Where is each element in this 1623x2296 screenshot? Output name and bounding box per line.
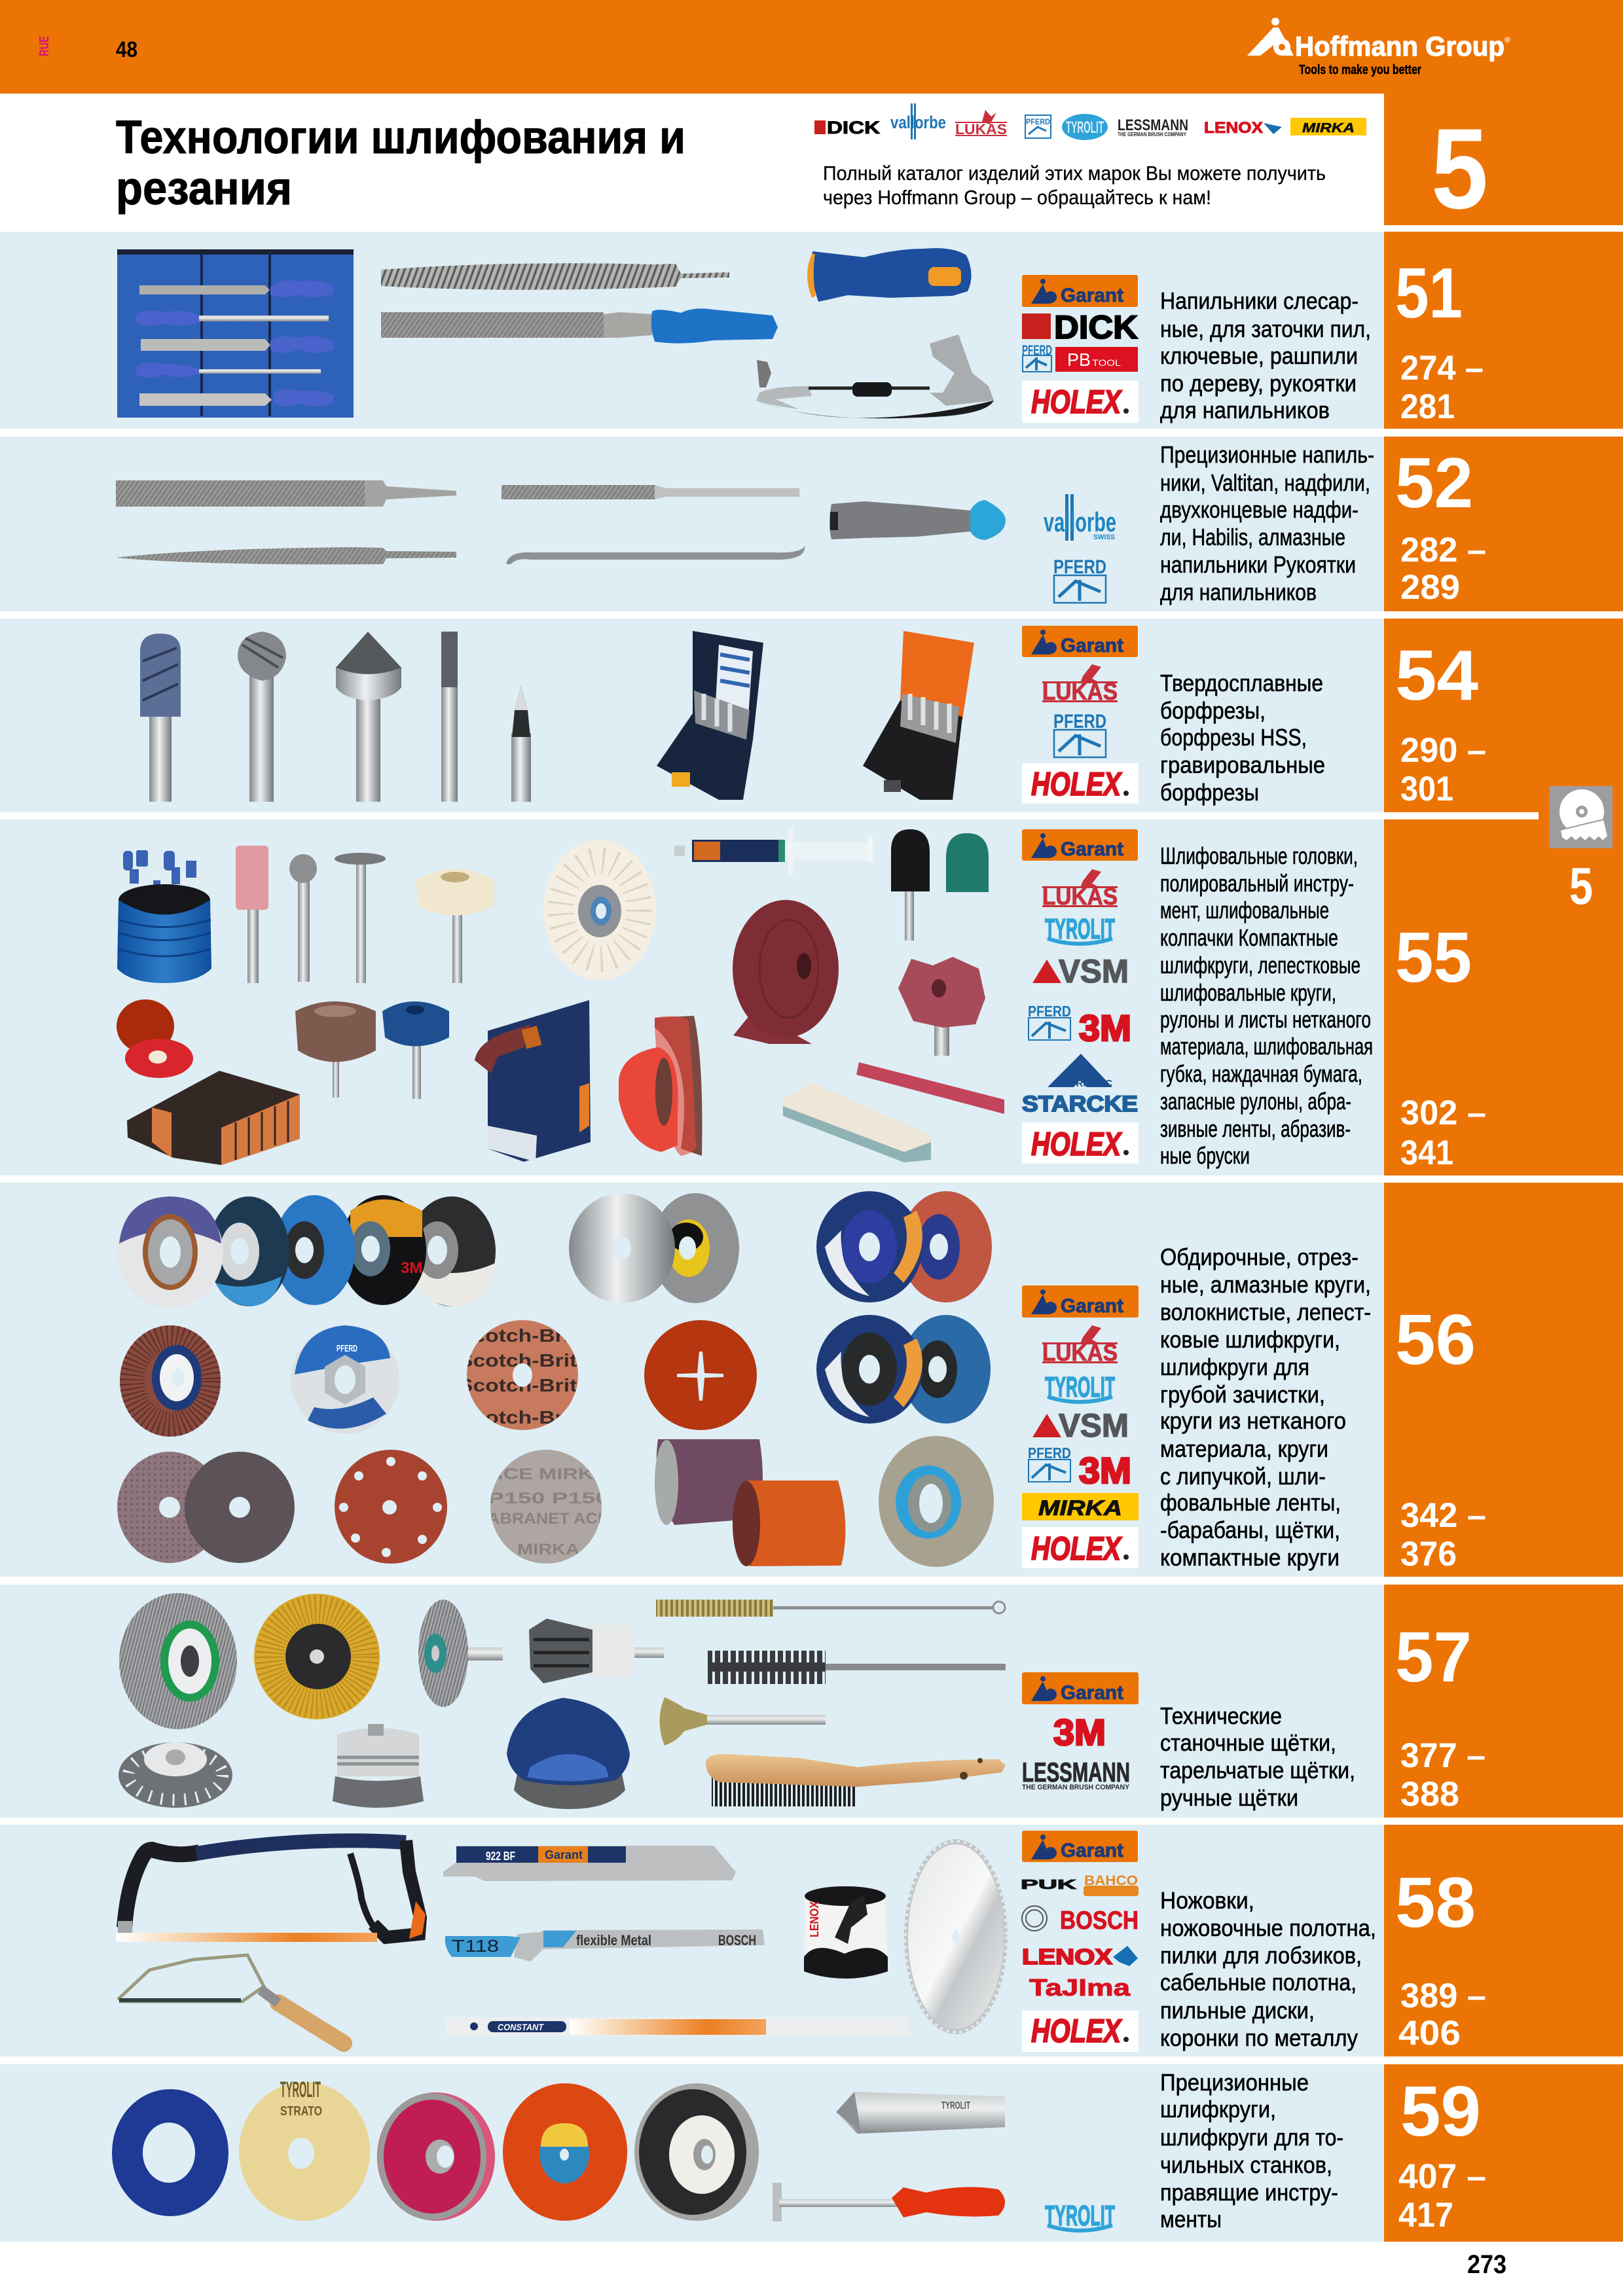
logo: Bosch: BOSCH: [1060, 1907, 1139, 1935]
group number 51: 51: [1395, 253, 1463, 333]
description 55: мент, шлифовальные: [1160, 897, 1329, 924]
description 56: фовальные ленты,: [1160, 1489, 1341, 1516]
description 54: борфрезы,: [1160, 697, 1266, 724]
product: Scotch-Brite disc: Scotch-Brite: [458, 1350, 589, 1371]
product: hacksaw: [116, 1840, 426, 1942]
chapter number block: [1384, 94, 1623, 233]
brand logo row: LENOX: [1204, 119, 1263, 137]
brand logos band 54: [1022, 626, 1139, 804]
product: pink mounted stone: [236, 846, 268, 983]
brand logo row: LESSMANN: [1118, 117, 1188, 134]
description 59: шлифкруги для то-: [1160, 2124, 1343, 2151]
pages 342-376: 342 –: [1400, 1496, 1486, 1535]
description 52: двухконцевые надфи-: [1160, 496, 1359, 523]
description 58: сабельные полотна,: [1160, 1969, 1357, 1996]
product: burr set in navy case: [657, 631, 763, 800]
product: half round rasp: [381, 263, 729, 290]
logo: PFERD: PFERD: [1053, 711, 1106, 732]
product: diamond dresser: [836, 2092, 1005, 2134]
brand logos band 59: [1045, 2200, 1115, 2232]
product: adjustable file holder: [756, 334, 994, 418]
description 58: Ножовки,: [1160, 1887, 1254, 1914]
product: Mirka net disc: MIRKA: [517, 1541, 579, 1558]
product: black tube brush: [708, 1651, 1006, 1684]
catalog note: Полный каталог изделий этих марок Вы можете получить: [823, 162, 1326, 185]
logo: Bahco: [1084, 1873, 1139, 1896]
product: green sanding cap: [946, 833, 989, 892]
description 59: шлифкруги,: [1160, 2096, 1276, 2123]
product: reciprocating blade: Garant: [545, 1848, 583, 1861]
product: flap disc and blue cleaning disc: [816, 1315, 991, 1424]
description 51: ключевые, рашпили: [1160, 342, 1358, 369]
description 52: ли, Habilis, алмазные: [1160, 524, 1345, 550]
pages 377-388: 388: [1400, 1775, 1459, 1814]
small vertical code RUE: RUE: [37, 36, 52, 56]
brand logo row: PFERD: [1026, 117, 1050, 126]
product: blue canister with mounted points: [117, 850, 211, 983]
product: knotted end brush: [529, 1619, 664, 1683]
group number 58: 58: [1395, 1863, 1476, 1943]
logo: Vallorbe: SWISS: [1093, 533, 1115, 541]
logo: VSM: VSM: [1059, 1407, 1129, 1444]
product: cream flap wheel: [416, 869, 494, 983]
description 56: грубой зачистки,: [1160, 1381, 1325, 1408]
pages 282-289: 282 –: [1400, 531, 1486, 569]
product: Scotch-Brite disc: Scotch-Brite: [458, 1375, 589, 1395]
pages 282-289: 289: [1400, 568, 1460, 607]
product: flap discs navy and red: [816, 1191, 992, 1302]
brand logo row: TYROLIT: [1066, 118, 1104, 137]
product: hacksaw blade long: CONSTANT: [498, 2022, 544, 2032]
logo: Vallorbe: [1044, 494, 1116, 541]
product: yellow bristle disc: [254, 1594, 380, 1719]
pages 274-281: 281: [1400, 387, 1455, 426]
logo: Tyrolit: TYROLIT: [1045, 1371, 1115, 1403]
logo: Garant: Garant: [1061, 635, 1123, 656]
product: oval burr: [238, 632, 286, 802]
product: blue grinding wheel: [112, 2089, 228, 2216]
logo: PB Swiss Tools: TOOL: [1092, 357, 1121, 368]
product: sanding sponge blocks: [127, 1071, 300, 1165]
product: reciprocating blade: 922 BF: [486, 1850, 515, 1863]
description 55: шлифкруги, лепестковые: [1160, 952, 1360, 978]
product: white polishing buff: [543, 840, 656, 980]
group number 57: 57: [1395, 1617, 1472, 1697]
group number 52: 52: [1395, 443, 1473, 523]
product: slender burr: [441, 632, 458, 802]
product: Mirka net disc: [488, 1450, 609, 1564]
panel: band 55 grinding heads: [0, 819, 1623, 1175]
brand logo row: DICK: [827, 118, 881, 137]
description 56: Обдирочные, отрез-: [1160, 1244, 1359, 1270]
logo: Tyrolit: [1045, 1371, 1115, 1403]
logo: Hoffmann Group: [1247, 18, 1510, 77]
description 56: шлифкруги для: [1160, 1354, 1309, 1380]
description 54: борфрезы: [1160, 779, 1259, 806]
panel: band 52 precision files: [0, 437, 1623, 611]
logo: Garant: Garant: [1061, 1682, 1123, 1704]
description 56: с липучкой, шли-: [1160, 1463, 1326, 1490]
description 56: материала, круги: [1160, 1435, 1328, 1462]
logo: Hoffmann Group: ®: [1504, 35, 1510, 45]
product: abrasive drum: [655, 1439, 763, 1525]
pages 290-301: 290 –: [1400, 731, 1486, 770]
logo: Lukas: LUKAS: [1042, 678, 1118, 705]
description 51: ные, для заточки пил,: [1160, 315, 1371, 342]
panel: page title area: [0, 94, 1623, 233]
logo: PFERD: [1028, 1003, 1071, 1040]
product: thin disc point: [335, 853, 386, 983]
description 54: Твердосплавные: [1160, 670, 1323, 696]
product: black-white cup wheel: [634, 2083, 759, 2221]
logo: PFERD: PFERD: [1022, 343, 1052, 358]
product: jigsaw blade: flexible Metal: [576, 1932, 651, 1948]
description 54: борфрезы HSS,: [1160, 724, 1307, 751]
logo: Lessmann: [1022, 1757, 1130, 1791]
brand logos band 56: [1022, 1285, 1139, 1568]
product: orange cut-off wheel: [503, 2083, 627, 2221]
pages 302-341: 302 –: [1400, 1094, 1486, 1132]
logo: DICK: [1022, 309, 1138, 346]
description 56: круги из нетканого: [1160, 1407, 1346, 1434]
brand logos band 51: [1022, 275, 1139, 423]
pages 342-376: 376: [1400, 1535, 1457, 1573]
product: Mirka net disc: ACE MIRKA: [488, 1465, 609, 1483]
group number 54: 54: [1395, 636, 1478, 715]
product: diamond dresser: TYROLIT: [941, 2100, 970, 2111]
product: red sanding belts: [619, 1016, 702, 1156]
product: red fibre disc: [117, 999, 174, 1053]
description 59: Прецизионные: [1160, 2069, 1309, 2096]
page number: 273: [1467, 2250, 1506, 2279]
product: file set in blue pouch: [117, 249, 354, 418]
pages 407-417: 417: [1398, 2196, 1453, 2234]
product: blue cup brush: [507, 1698, 630, 1809]
logo: PFERD: [1022, 343, 1052, 372]
description 55: шлифовальные круги,: [1160, 979, 1336, 1006]
product: non-woven roll: [733, 900, 839, 1044]
logo: HOLEX: HOLEX: [1031, 384, 1122, 420]
brand logo row: [814, 103, 1366, 140]
product: perforated sanding disc: [335, 1450, 447, 1564]
product: PFERD cut-off disc: [291, 1325, 399, 1434]
product: file handle with blue end: [830, 500, 1006, 540]
logo: HOLEX: HOLEX: [1031, 766, 1122, 802]
product: Scotch-Brite disc: Scotch-Brite: [458, 1407, 589, 1427]
product: diamond saw blades: [569, 1193, 739, 1303]
product: flat file with blue handle: [381, 308, 778, 344]
logo: Bahco: BAHCO: [1084, 1873, 1138, 1888]
product: engraving cutter: [511, 686, 531, 802]
product: non-woven discs pair: [117, 1452, 295, 1563]
logo: PUK: PUK: [1021, 1878, 1077, 1892]
description 57: Технические: [1160, 1702, 1282, 1729]
description 55: запасные рулоны, абра-: [1160, 1088, 1351, 1115]
product: tapered thin file: [116, 547, 456, 564]
side tab number: 5: [1569, 857, 1593, 915]
product: small coping saw: [118, 1955, 344, 2043]
product: syringe paste: [674, 827, 873, 875]
description 59: менты: [1160, 2206, 1222, 2233]
chapter number block: 5: [1431, 105, 1488, 233]
logo: PFERD: [1053, 556, 1106, 603]
brand logo row: LUKAS: [955, 121, 1007, 137]
title: Технологии шлифования и: [116, 112, 685, 164]
product: gray ball point: [289, 854, 317, 982]
brand logo row: vallorbe: [890, 113, 946, 132]
brand logos band 52: [1044, 494, 1116, 603]
product: jigsaw blade: [445, 1929, 765, 1962]
product: pink cup wheel: [377, 2092, 495, 2221]
logo: Tyrolit: TYROLIT: [1045, 2200, 1115, 2232]
brand logos band 58: [1021, 1831, 1139, 2052]
panel: band 59 precision grinding: [0, 2064, 1623, 2242]
logo: PFERD: PFERD: [1053, 556, 1106, 578]
pages 407-417: 407 –: [1398, 2157, 1486, 2196]
product: Scotch-Brite disc: [467, 1320, 578, 1430]
panel: band 57 brushes: [0, 1585, 1623, 1818]
product: screwdriver-style blue handle: [807, 248, 972, 302]
brand logo row: THE GERMAN BRUSH COMPANY: [1118, 132, 1187, 137]
description 57: станочные щётки,: [1160, 1729, 1336, 1756]
logo: Garant: Garant: [1061, 1295, 1123, 1317]
logo: Garant: [1022, 1285, 1139, 1318]
logo: Vallorbe: vallorbe: [1044, 507, 1116, 537]
product: wooden hand wire brush: [706, 1754, 1006, 1806]
description 55: зивные ленты, абразив-: [1160, 1115, 1351, 1142]
description 55: Шлифовальные головки,: [1160, 842, 1358, 869]
pages 274-281: 274 –: [1400, 349, 1484, 387]
product: pink abrasive stick: [856, 1062, 1004, 1114]
pages 302-341: 341: [1400, 1134, 1453, 1172]
product: Mirka net disc: P150 P150: [488, 1490, 609, 1507]
description 58: коронки по металлу: [1160, 2024, 1358, 2051]
product: needle file curved: [506, 546, 805, 564]
product: circular saw disc: [904, 1839, 1008, 2034]
logo: Lessmann: THE GERMAN BRUSH COMPANY: [1022, 1784, 1130, 1791]
logo: HOLEX: HOLEX: [1031, 1530, 1122, 1567]
logo: Friatec: FRIATEC: [1070, 1078, 1112, 1089]
pages 389-406: 389 –: [1400, 1977, 1486, 2015]
logo: Garant: [1022, 829, 1138, 861]
logo: Garant: Garant: [1061, 285, 1123, 306]
product: cone burr: [336, 632, 401, 802]
logo: Hoffmann Group: Hoffmann Group: [1295, 31, 1504, 62]
product: Mirka net disc: ABRANET ACE: [488, 1510, 609, 1528]
logo: Lukas: [1042, 869, 1118, 910]
panel: band 58 saws: [0, 1825, 1623, 2056]
logo: Garant: [1022, 626, 1138, 657]
panel: top header bar: [0, 0, 1623, 94]
description 52: ники, Valtitan, надфили,: [1160, 469, 1370, 496]
logo: Lessmann: LESSMANN: [1022, 1757, 1130, 1787]
product: compact grinding wheel: [879, 1436, 994, 1567]
product: flap wheel with hub: [120, 1325, 221, 1437]
description 58: пилки для лобзиков,: [1160, 1942, 1362, 1969]
product: hacksaw blade long: [446, 2017, 909, 2036]
product: reciprocating blade: [443, 1846, 736, 1881]
description 51: по дереву, рукоятки: [1160, 370, 1357, 397]
product: small brass cup brush: [660, 1697, 826, 1746]
product: bi-metal hole saw: LENOX: [808, 1901, 821, 1937]
catalog note: через Hoffmann Group – обращайтесь к нам!: [823, 186, 1211, 209]
product: T-handle dresser: [773, 2183, 1005, 2221]
description 56: -барабаны, щётки,: [1160, 1516, 1340, 1543]
product: jigsaw blade: T118: [452, 1936, 499, 1956]
product: flat hand file: [116, 480, 456, 507]
product: jigsaw blade: BOSCH: [718, 1932, 756, 1948]
logo: HOLEX: HOLEX: [1031, 1126, 1122, 1162]
product: cream Strato wheel: STRATO: [280, 2104, 322, 2119]
logo: PFERD: PFERD: [1028, 1444, 1071, 1462]
logo: PFERD: PFERD: [1028, 1003, 1071, 1020]
logo: DICK: DICK: [1054, 309, 1138, 346]
product: red fibre disc with cross hole: [644, 1320, 757, 1430]
logo: Lukas: LUKAS: [1042, 883, 1118, 910]
description 59: правящие инстру-: [1160, 2179, 1338, 2206]
logo: Lukas: [1042, 1325, 1118, 1366]
description 52: напильники Рукоятки: [1160, 551, 1356, 578]
product: abrasive roll box: [475, 1000, 591, 1162]
description 55: колпачки Компактные: [1160, 924, 1338, 951]
logo: Mirka: MIRKA: [1038, 1496, 1122, 1520]
description 55: рулоны и листы нетканого: [1160, 1006, 1371, 1033]
product: orange sleeve: [733, 1480, 845, 1566]
logo: Tyrolit: [1045, 913, 1115, 945]
logo: Garant: [1022, 275, 1138, 307]
description 52: для напильников: [1160, 579, 1317, 605]
product: white sharpening stone: [783, 1083, 932, 1162]
description 51: для напильников: [1160, 397, 1330, 423]
product: knotted bevel brush: [119, 1742, 232, 1808]
product: brown flap wheel: [295, 1001, 376, 1098]
description 57: ручные щётки: [1160, 1784, 1298, 1811]
logo: VSM: VSM: [1059, 953, 1129, 990]
product: small wire wheel: [418, 1600, 503, 1707]
product: five cut-off discs: 3M: [401, 1259, 422, 1277]
product: star abrasive point: [898, 957, 985, 1056]
product: five cut-off discs: [117, 1195, 496, 1308]
logo: PB Swiss Tools: PB: [1067, 350, 1091, 370]
logo: HOLEX: HOLEX: [1031, 2013, 1122, 2049]
logo: 3M: 3M: [1079, 1007, 1131, 1049]
description 56: ные, алмазные круги,: [1160, 1271, 1371, 1298]
description 55: материала, шлифовальная: [1160, 1033, 1373, 1060]
panel: band 54 carbide burrs: [0, 619, 1623, 819]
description 52: Прецизионные напиль-: [1160, 441, 1374, 468]
logo: Starcke: STARCKE: [1022, 1092, 1138, 1117]
panel: band 51 files: [0, 232, 1623, 429]
logo: Lenox: [1022, 1945, 1138, 1969]
pages 290-301: 301: [1400, 770, 1453, 808]
description 51: Напильники слесар-: [1160, 287, 1359, 314]
product: cylindrical burr: [140, 634, 181, 802]
logo: Mirka: [1022, 1493, 1139, 1520]
logo: Lukas: [1042, 664, 1118, 705]
logo: 3M: 3M: [1079, 1450, 1131, 1491]
product: PFERD cut-off disc: PFERD: [337, 1343, 357, 1354]
product: brass tube brush: [656, 1600, 1005, 1617]
logo: Garant: Garant: [1061, 1840, 1123, 1861]
side tab icon: disc and saw: [1550, 786, 1613, 848]
logo: Lenox: LENOX: [1022, 1945, 1112, 1969]
pages 389-406: 406: [1398, 2014, 1461, 2053]
product: knotted cup brush: [333, 1724, 424, 1808]
description 58: ножовочные полотна,: [1160, 1914, 1376, 1941]
description 58: пильные диски,: [1160, 1997, 1315, 2024]
logo: Garant: Garant: [1061, 838, 1123, 860]
description 55: ные бруски: [1160, 1142, 1250, 1169]
brand logos band 55: [1022, 829, 1139, 1164]
logo: Tajima: TaJIma: [1029, 1974, 1131, 2001]
description 55: полировальный инстру-: [1160, 870, 1354, 897]
description 59: чильных станков,: [1160, 2151, 1332, 2178]
logo: PFERD: [1028, 1444, 1071, 1482]
description 56: ковые шлифкруги,: [1160, 1326, 1340, 1353]
group number 59: 59: [1400, 2072, 1481, 2151]
description 54: гравировальные: [1160, 751, 1325, 778]
description 56: волокнистые, лепест-: [1160, 1299, 1371, 1325]
logo: 3M: 3M: [1053, 1712, 1106, 1753]
brand logo row: MIRKA: [1302, 121, 1355, 135]
product: bi-metal hole saw: [804, 1886, 888, 1979]
product: Scotch-Brite disc: Scotch-Brite: [458, 1325, 589, 1346]
description 57: тарельчатые щётки,: [1160, 1757, 1355, 1784]
panel: band 56 abrasive discs: [0, 1183, 1623, 1577]
product: wide wire wheel: [119, 1593, 237, 1729]
logo: Tyrolit: TYROLIT: [1045, 913, 1115, 945]
description 55: губка, наждачная бумага,: [1160, 1060, 1362, 1087]
group number 56: 56: [1395, 1300, 1476, 1380]
logo: PFERD: [1053, 711, 1106, 757]
logo: Garant: [1022, 1672, 1139, 1704]
group number 55: 55: [1395, 918, 1472, 997]
product: small red disc: [125, 1039, 193, 1078]
product: blue flap wheel: [382, 1001, 449, 1099]
product: needle file straight: [501, 485, 799, 499]
pages 377-388: 377 –: [1400, 1736, 1486, 1775]
catalog chapter number: 48: [116, 37, 137, 62]
title: резания: [116, 163, 292, 215]
logo: Friatec: [1048, 1054, 1112, 1089]
logo: Hoffmann Group: Tools to make you better: [1299, 63, 1421, 77]
product: burr set in orange case: [863, 631, 974, 800]
logo: PB Swiss Tools: [1055, 347, 1138, 372]
product: cream Strato wheel: TYROLIT: [280, 2077, 321, 2102]
product: cream Strato wheel: [239, 2077, 370, 2221]
product: black sanding cap: [891, 829, 930, 941]
logo: FH circle: [1022, 1906, 1047, 1931]
brand logos band 57: [1022, 1672, 1139, 1791]
description 56: компактные круги: [1160, 1544, 1340, 1571]
logo: Garant: [1022, 1831, 1138, 1862]
logo: Lukas: LUKAS: [1042, 1339, 1118, 1366]
